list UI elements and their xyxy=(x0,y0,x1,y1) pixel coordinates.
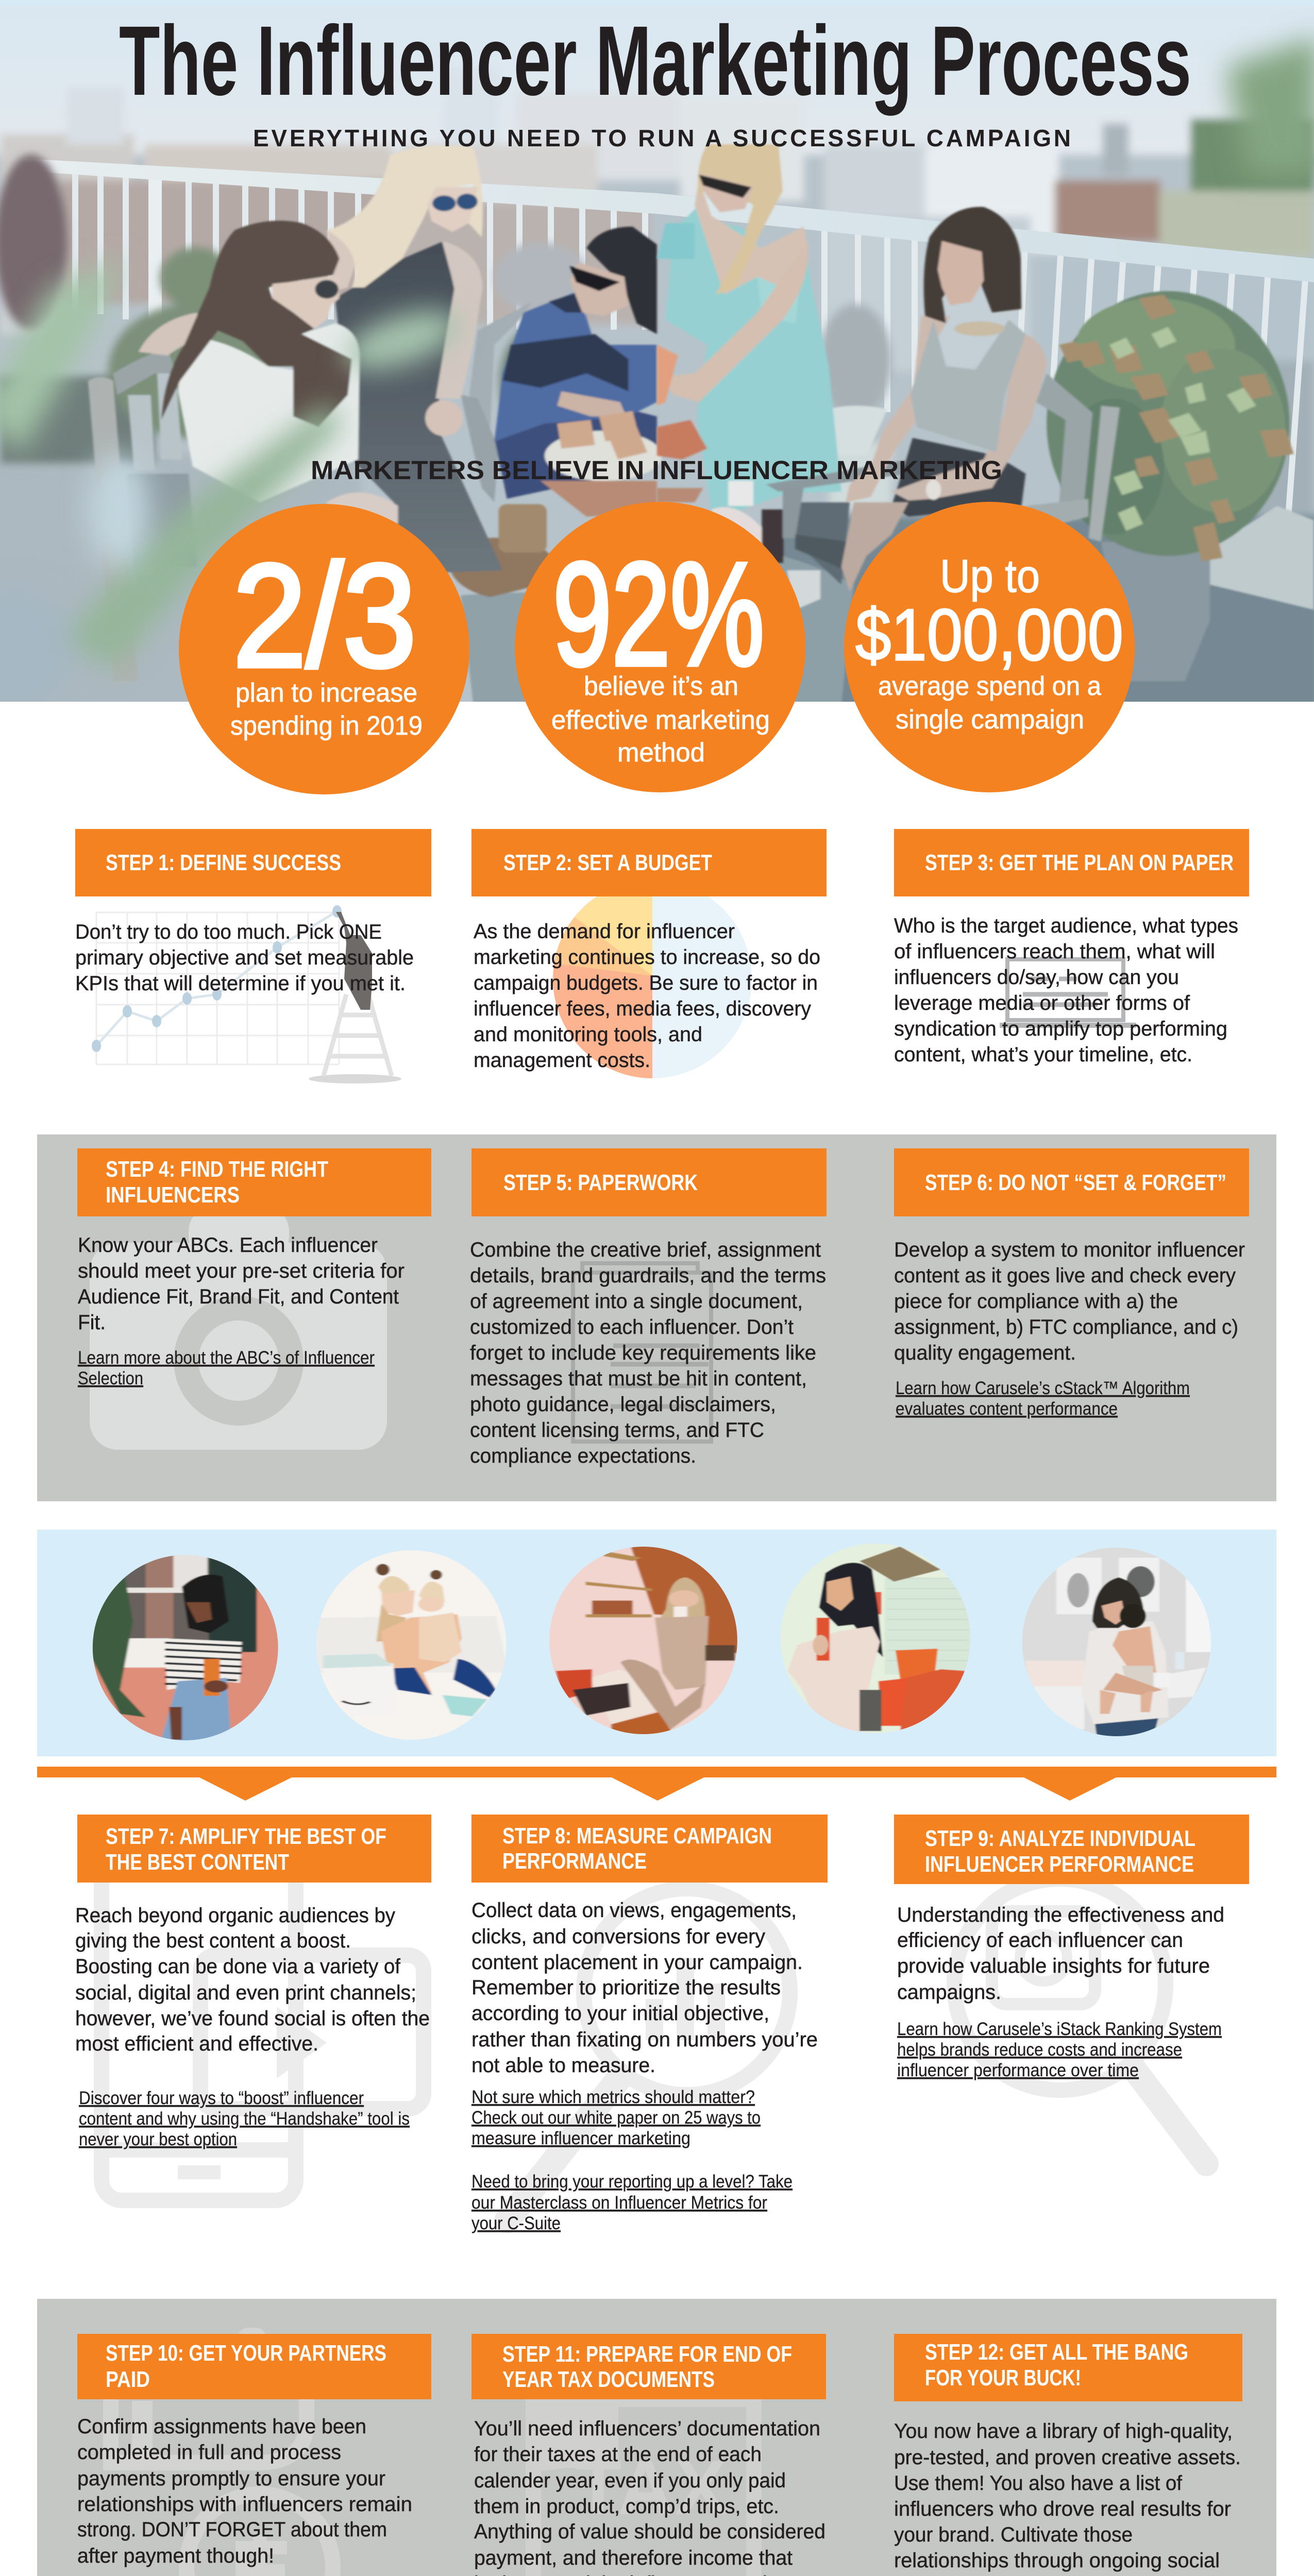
header: step 12: FOR YOUR BUCK! xyxy=(925,2365,1081,2391)
woman four: teal dress xyxy=(665,205,841,513)
text: step 7: Boosting can be done via a variety of xyxy=(75,1955,401,1978)
link: step 6: evaluates content performance xyxy=(896,1399,1118,1419)
scene right half: woman in teal, woman in grey, chair xyxy=(657,144,1120,706)
text: step 5: details, brand guardrails, and the terms xyxy=(470,1264,826,1287)
icon: phone and video xyxy=(102,1855,424,2200)
text: step 5: of agreement into a single document, xyxy=(470,1290,803,1313)
stat circle: up to $100,000: $100,000 xyxy=(855,594,1123,676)
text: step 4 xyxy=(78,1234,405,1334)
top strip xyxy=(0,0,1314,6)
header: step 7: STEP 7: AMPLIFY THE BEST OF xyxy=(106,1824,386,1849)
link: step 7: Discover four ways to “boost” influencer xyxy=(79,2088,364,2108)
text: step 12: your brand. Cultivate those xyxy=(894,2523,1133,2546)
text: step 5: forget to include key requirements like xyxy=(470,1342,816,1364)
text: step 7: however, we’ve found social is often the xyxy=(75,2007,430,2030)
text: step 10: relationships with influencers remain xyxy=(77,2493,412,2516)
header: step 11 xyxy=(471,2334,826,2399)
link: step 4: Learn more about the ABC’s of Influencer xyxy=(78,1348,375,1368)
text: step 7 xyxy=(75,1904,430,2055)
subtitle: EVERYTHING YOU NEED TO RUN A SUCCESSFUL CAMPAIGN xyxy=(253,125,1071,151)
text: step 3 xyxy=(894,914,1238,1066)
photo circle: woman with SOLA bar xyxy=(779,1542,972,1735)
link: step 8 white paper: Check out our white paper on 25 ways to xyxy=(471,2108,761,2128)
header: step 3: STEP 3: GET THE PLAN ON PAPER xyxy=(925,850,1234,875)
text: step 8: content placement in your campaign. xyxy=(471,1951,803,1974)
header: step 10 xyxy=(77,2334,431,2399)
header: step 10: PAID xyxy=(106,2367,150,2392)
stat circle: 92%: believe it’s an xyxy=(584,671,738,701)
text: step 2 xyxy=(474,920,820,1072)
railing xyxy=(25,159,1314,518)
header: step 5: STEP 5: PAPERWORK xyxy=(503,1170,698,1195)
header: step 8 xyxy=(471,1815,828,1883)
text: step 4: Audience Fit, Brand Fit, and Content xyxy=(78,1285,399,1308)
header: step 3 xyxy=(894,829,1249,896)
header: step 9: INFLUENCER PERFORMANCE xyxy=(925,1852,1194,1877)
text: step 3: content, what’s your timeline, etc. xyxy=(894,1043,1192,1066)
text: step 3: leverage media or other forms of xyxy=(894,992,1190,1014)
link: step 8 masterclass: our Masterclass on Influencer Metrics for xyxy=(471,2193,767,2213)
link: step 9: helps brands reduce costs and increase xyxy=(897,2040,1182,2060)
header: step 12 xyxy=(894,2334,1242,2401)
text: step 11: calender year, even if you only paid xyxy=(474,2469,786,2492)
text: step 5: photo guidance, legal disclaimers, xyxy=(470,1393,776,1416)
stat circle: 92%: 92% xyxy=(553,533,764,696)
stat circle: 92% xyxy=(515,502,805,792)
text: step 5: content licensing terms, and FTC xyxy=(470,1419,764,1442)
text: step 12: pre-tested, and proven creative assets. xyxy=(894,2446,1241,2469)
text: step 1: KPIs that will determine if you met it. xyxy=(75,972,406,995)
link: step 9 xyxy=(897,2019,1222,2080)
link: step 7 xyxy=(79,2088,410,2149)
icon: paperwork document xyxy=(573,1263,711,1442)
hero photo: rooftop group of friends xyxy=(0,0,1314,721)
link: step 8 white paper: Not sure which metrics should matter? xyxy=(471,2087,755,2107)
text: step 11: them in product, comp’d trips, etc. xyxy=(474,2495,779,2518)
text: step 11: Anything of value should be considered xyxy=(474,2520,826,2543)
text: step 9: Understanding the effectiveness and xyxy=(897,1904,1224,1926)
header: step 11: STEP 11: PREPARE FOR END OF xyxy=(502,2342,792,2367)
text: step 2: marketing continues to increase, so do xyxy=(474,946,820,969)
text: step 7: most efficient and effective. xyxy=(75,2032,318,2055)
stat circle: up to $100,000: Up to xyxy=(940,551,1040,602)
link: step 8 masterclass: your C-Suite xyxy=(471,2213,561,2233)
floor and terrace xyxy=(0,376,1314,721)
photo sky and skyline xyxy=(0,0,1314,721)
scene left half: chairs and women xyxy=(88,145,662,706)
link: step 4: Selection xyxy=(78,1368,143,1388)
woman five: grey tank xyxy=(846,316,950,502)
text: step 12: relationships through ongoing social xyxy=(894,2549,1220,2572)
header: step 1: STEP 1: DEFINE SUCCESS xyxy=(106,850,341,875)
text: step 1: Don’t try to do too much. Pick ONE xyxy=(75,921,382,943)
header: step 12: STEP 12: GET ALL THE BANG xyxy=(925,2340,1188,2365)
text: step 10 xyxy=(77,2415,412,2567)
header: step 6 xyxy=(894,1148,1249,1216)
link: step 8 masterclass xyxy=(471,2172,793,2233)
text: step 9 xyxy=(897,1904,1224,2004)
text: step 3: syndication to amplify top performing xyxy=(894,1018,1227,1040)
stat circle: up to $100,000: single campaign xyxy=(896,705,1084,735)
header: step 6: STEP 6: DO NOT “SET & FORGET” xyxy=(925,1170,1226,1195)
photo circle: mother holding baby xyxy=(1019,1546,1216,1740)
link: step 4 xyxy=(78,1348,375,1388)
header: step 1 xyxy=(75,829,431,896)
stat circle: 92%: effective marketing xyxy=(551,705,770,735)
link: step 6: Learn how Carusele’s cStack™ Algorithm xyxy=(896,1378,1190,1398)
link: step 6 xyxy=(896,1378,1190,1419)
panel: steps 10 to 12 xyxy=(37,2299,1276,2576)
icon: camera xyxy=(90,1206,387,1450)
header: step 4 xyxy=(77,1148,431,1216)
text: step 5: customized to each influencer. Don’t xyxy=(470,1316,794,1338)
text: step 12: You now have a library of high-quality, xyxy=(894,2420,1233,2443)
text: step 6 xyxy=(894,1239,1245,1364)
link: step 7: never your best option xyxy=(79,2129,237,2149)
text: step 6: Develop a system to monitor influencer xyxy=(894,1239,1245,1261)
photo circle: woman in striped top xyxy=(77,1552,291,1741)
middle chair xyxy=(469,302,532,431)
icon: line chart and ladder climber xyxy=(92,905,401,1083)
text: step 8: not able to measure. xyxy=(471,2054,655,2077)
text: step 6: assignment, b) FTC compliance, and c) xyxy=(894,1316,1238,1338)
text: step 8: Collect data on views, engagements, xyxy=(471,1899,797,1922)
text: step 11 xyxy=(474,2417,826,2576)
header: step 7 xyxy=(77,1815,431,1883)
link: step 7: content and why using the “Handshake” tool is xyxy=(79,2109,410,2129)
text: step 4: Fit. xyxy=(78,1311,106,1334)
photo circle: woman in kitchen with mug xyxy=(547,1546,744,1736)
text: step 3: influencers do/say, how can you xyxy=(894,966,1179,989)
text: step 12: Use them! You also have a list of xyxy=(894,2472,1183,2495)
text: step 12: influencers who drove real results for xyxy=(894,2498,1231,2520)
bowl of ice cream xyxy=(541,481,657,517)
text: step 5: messages that must be hit in content, xyxy=(470,1367,807,1390)
text: step 5 xyxy=(470,1239,826,1467)
link: step 8 white paper xyxy=(471,2087,761,2148)
left plants xyxy=(0,155,891,438)
text: step 3: of influencers reach them, what will xyxy=(894,940,1215,963)
text: step 8: rather than fixating on numbers you’re xyxy=(471,2028,818,2051)
header: step 7: THE BEST CONTENT xyxy=(106,1850,289,1875)
photos group 1 xyxy=(77,1546,744,1741)
icon: magnifier with camera xyxy=(954,1879,1206,2164)
text: step 7: social, digital and even print channels; xyxy=(75,1981,416,2004)
stat circle: 2/3 xyxy=(179,504,469,794)
icon: magnifier with bars xyxy=(507,1889,790,2221)
text: step 5: Combine the creative brief, assignment xyxy=(470,1239,821,1261)
text: step 9: efficiency of each influencer can xyxy=(897,1929,1183,1952)
photo circle: mother and baby in beanies xyxy=(312,1549,513,1741)
text: step 10: strong. DON’T FORGET about them xyxy=(77,2518,387,2541)
text: step 8: Remember to prioritize the results xyxy=(471,1976,781,1999)
left chair xyxy=(88,377,138,682)
text: step 10: Confirm assignments have been xyxy=(77,2415,366,2438)
icon: plan document on laptop xyxy=(1000,959,1136,1025)
text: step 11: for their taxes at the end of each xyxy=(474,2443,762,2466)
text: step 6: content as it goes live and check every xyxy=(894,1264,1236,1287)
icon: tax document xyxy=(526,2391,754,2576)
text: step 6: piece for compliance with a) the xyxy=(894,1290,1178,1313)
orange divider bar with arrows xyxy=(37,1767,1276,1801)
icon: tax document: TAX xyxy=(575,2444,727,2531)
header: step 8: STEP 8: MEASURE CAMPAIGN xyxy=(502,1823,772,1849)
text: step 1 xyxy=(75,921,414,995)
text: step 8: clicks, and conversions for every xyxy=(471,1925,765,1948)
right chair xyxy=(1036,374,1093,502)
text: step 11: payment, and therefore income that xyxy=(474,2547,793,2569)
stats heading: MARKETERS BELIEVE IN INFLUENCER MARKETING xyxy=(311,455,1002,485)
text: step 7: giving the best content a boost. xyxy=(75,1929,351,1952)
woman one: white top xyxy=(138,313,201,355)
text: step 10: after payment though! xyxy=(77,2545,274,2567)
text: step 2: management costs. xyxy=(474,1049,650,1072)
text: step 10: payments promptly to ensure your xyxy=(77,2467,385,2490)
link: step 8 white paper: measure influencer marketing xyxy=(471,2128,690,2148)
header: step 9: STEP 9: ANALYZE INDIVIDUAL xyxy=(925,1826,1195,1851)
text: step 2: influencer fees, media fees, discovery xyxy=(474,997,811,1020)
header: step 11: YEAR TAX DOCUMENTS xyxy=(502,2367,715,2392)
stat circle: 92%: method xyxy=(617,738,705,768)
stat circle: 2/3: spending in 2019 xyxy=(230,711,423,741)
link: step 9: Learn how Carusele’s iStack Ranking System xyxy=(897,2019,1222,2039)
text: step 4: Know your ABCs. Each influencer xyxy=(78,1234,378,1257)
icon: hand and dollar coin xyxy=(111,2328,333,2576)
right bush and planter xyxy=(1047,291,1314,682)
stat circle: up to $100,000: average spend on a xyxy=(878,671,1101,701)
icon: budget pie chart xyxy=(553,879,752,1078)
link: step 8 masterclass: Need to bring your reporting up a level? Take xyxy=(471,2172,793,2192)
stat circle: 2/3: plan to increase xyxy=(235,678,417,708)
text: step 6: quality engagement. xyxy=(894,1342,1076,1364)
text: step 7: Reach beyond organic audiences by xyxy=(75,1904,395,1927)
text: step 2: As the demand for influencer xyxy=(474,920,735,943)
text: step 10: completed in full and process xyxy=(77,2441,341,2464)
woman three: blue and navy stripes xyxy=(494,409,657,499)
text: step 8 xyxy=(471,1899,818,2077)
text: step 1: primary objective and set measurable xyxy=(75,946,414,969)
text: step 2: campaign budgets. Be sure to factor in xyxy=(474,972,818,994)
text: step 9: campaigns. xyxy=(897,1981,1001,2004)
stat circle: 2/3: 2/3 xyxy=(233,534,416,698)
header: step 4: INFLUENCERS xyxy=(106,1182,240,1208)
link: step 9: influencer performance over time xyxy=(897,2060,1139,2080)
text: step 9: provide valuable insights for future xyxy=(897,1955,1210,1977)
text: step 2: and monitoring tools, and xyxy=(474,1023,702,1046)
woman two: black dress xyxy=(335,241,503,574)
photos group 2 xyxy=(779,1542,1216,1740)
text: step 11: You’ll need influencers’ documentation xyxy=(474,2417,820,2440)
text: step 12 xyxy=(894,2420,1241,2576)
blurred foreground leaves xyxy=(0,36,1314,711)
header: step 8: PERFORMANCE xyxy=(502,1849,647,1874)
text: step 5: compliance expectations. xyxy=(470,1445,696,1467)
table and cookies xyxy=(461,592,657,706)
panel: steps 4 to 6 xyxy=(37,1134,1276,1501)
text: step 3: Who is the target audience, what types xyxy=(894,914,1238,937)
stat circle: up to $100,000 xyxy=(844,502,1135,792)
text: step 4: should meet your pre-set criteria for xyxy=(78,1260,405,1282)
header: step 10: STEP 10: GET YOUR PARTNERS xyxy=(106,2341,386,2366)
band: influencer photos xyxy=(37,1530,1276,1756)
header: step 2 xyxy=(471,829,827,896)
header: step 4: STEP 4: FIND THE RIGHT xyxy=(106,1157,328,1182)
header: step 9 xyxy=(894,1815,1249,1884)
text: step 8: according to your initial objective, xyxy=(471,2002,769,2025)
header: step 5 xyxy=(471,1148,827,1216)
header: step 2: STEP 2: SET A BUDGET xyxy=(503,850,712,875)
